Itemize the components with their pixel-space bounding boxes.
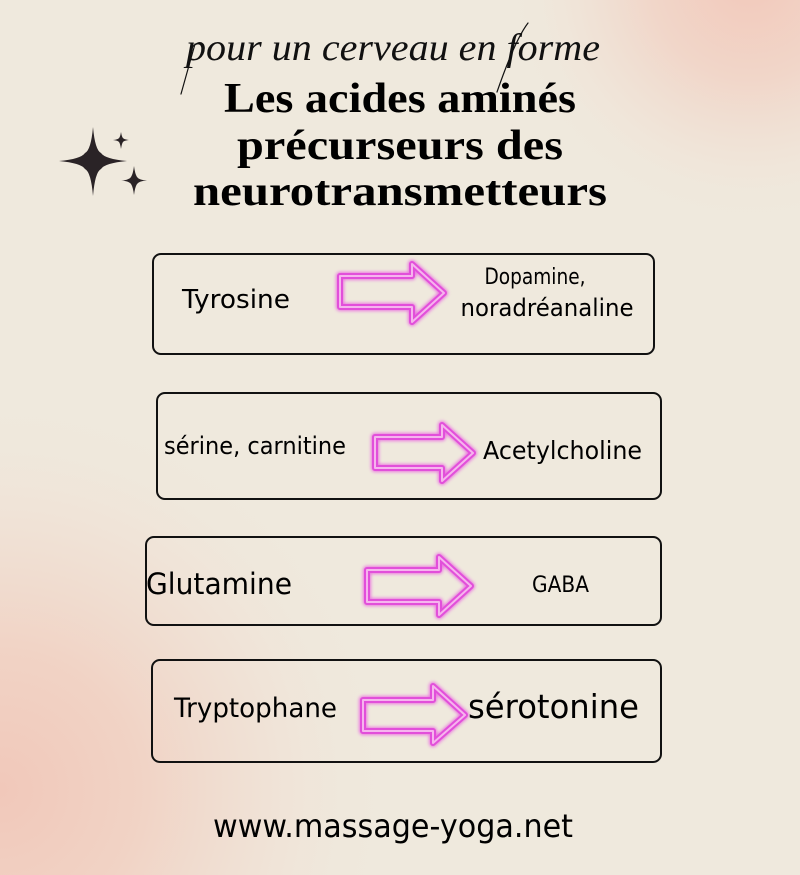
arrow: tryptophane to serotonine bbox=[363, 686, 465, 743]
panel: serine: Acetylcholine bbox=[483, 436, 642, 465]
website footer: www.massage-yoga.net bbox=[213, 807, 573, 845]
title bbox=[193, 76, 607, 215]
panel: tyrosine: Tyrosine bbox=[181, 285, 290, 315]
arrow: glutamine to GABA bbox=[367, 557, 471, 615]
panel: tyrosine bbox=[153, 254, 654, 354]
panel: tryptophane: sérotonine bbox=[468, 687, 639, 726]
panel: tryptophane bbox=[152, 660, 661, 762]
panel: glutamine: Glutamine bbox=[146, 567, 292, 601]
title: neurotransmetteurs bbox=[193, 169, 607, 215]
panel: tryptophane: Tryptophane bbox=[173, 693, 337, 724]
script subtitle bbox=[181, 23, 600, 94]
panel: serine: sérine, carnitine bbox=[164, 432, 346, 460]
arrow: serine to acetylcholine bbox=[375, 425, 473, 481]
panel: serine bbox=[157, 393, 661, 499]
panel: glutamine bbox=[146, 537, 661, 625]
panel: glutamine: GABA bbox=[532, 573, 589, 598]
arrow: tyrosine to dopamine bbox=[340, 264, 444, 322]
script subtitle: pour un cerveau en forme bbox=[183, 27, 600, 69]
panel: tyrosine: noradréanaline bbox=[460, 294, 634, 322]
title: précurseurs des bbox=[237, 123, 563, 169]
icon: sparkles bbox=[59, 127, 147, 196]
title: Les acides aminés bbox=[224, 76, 576, 122]
panel: tyrosine: Dopamine, bbox=[484, 265, 586, 290]
